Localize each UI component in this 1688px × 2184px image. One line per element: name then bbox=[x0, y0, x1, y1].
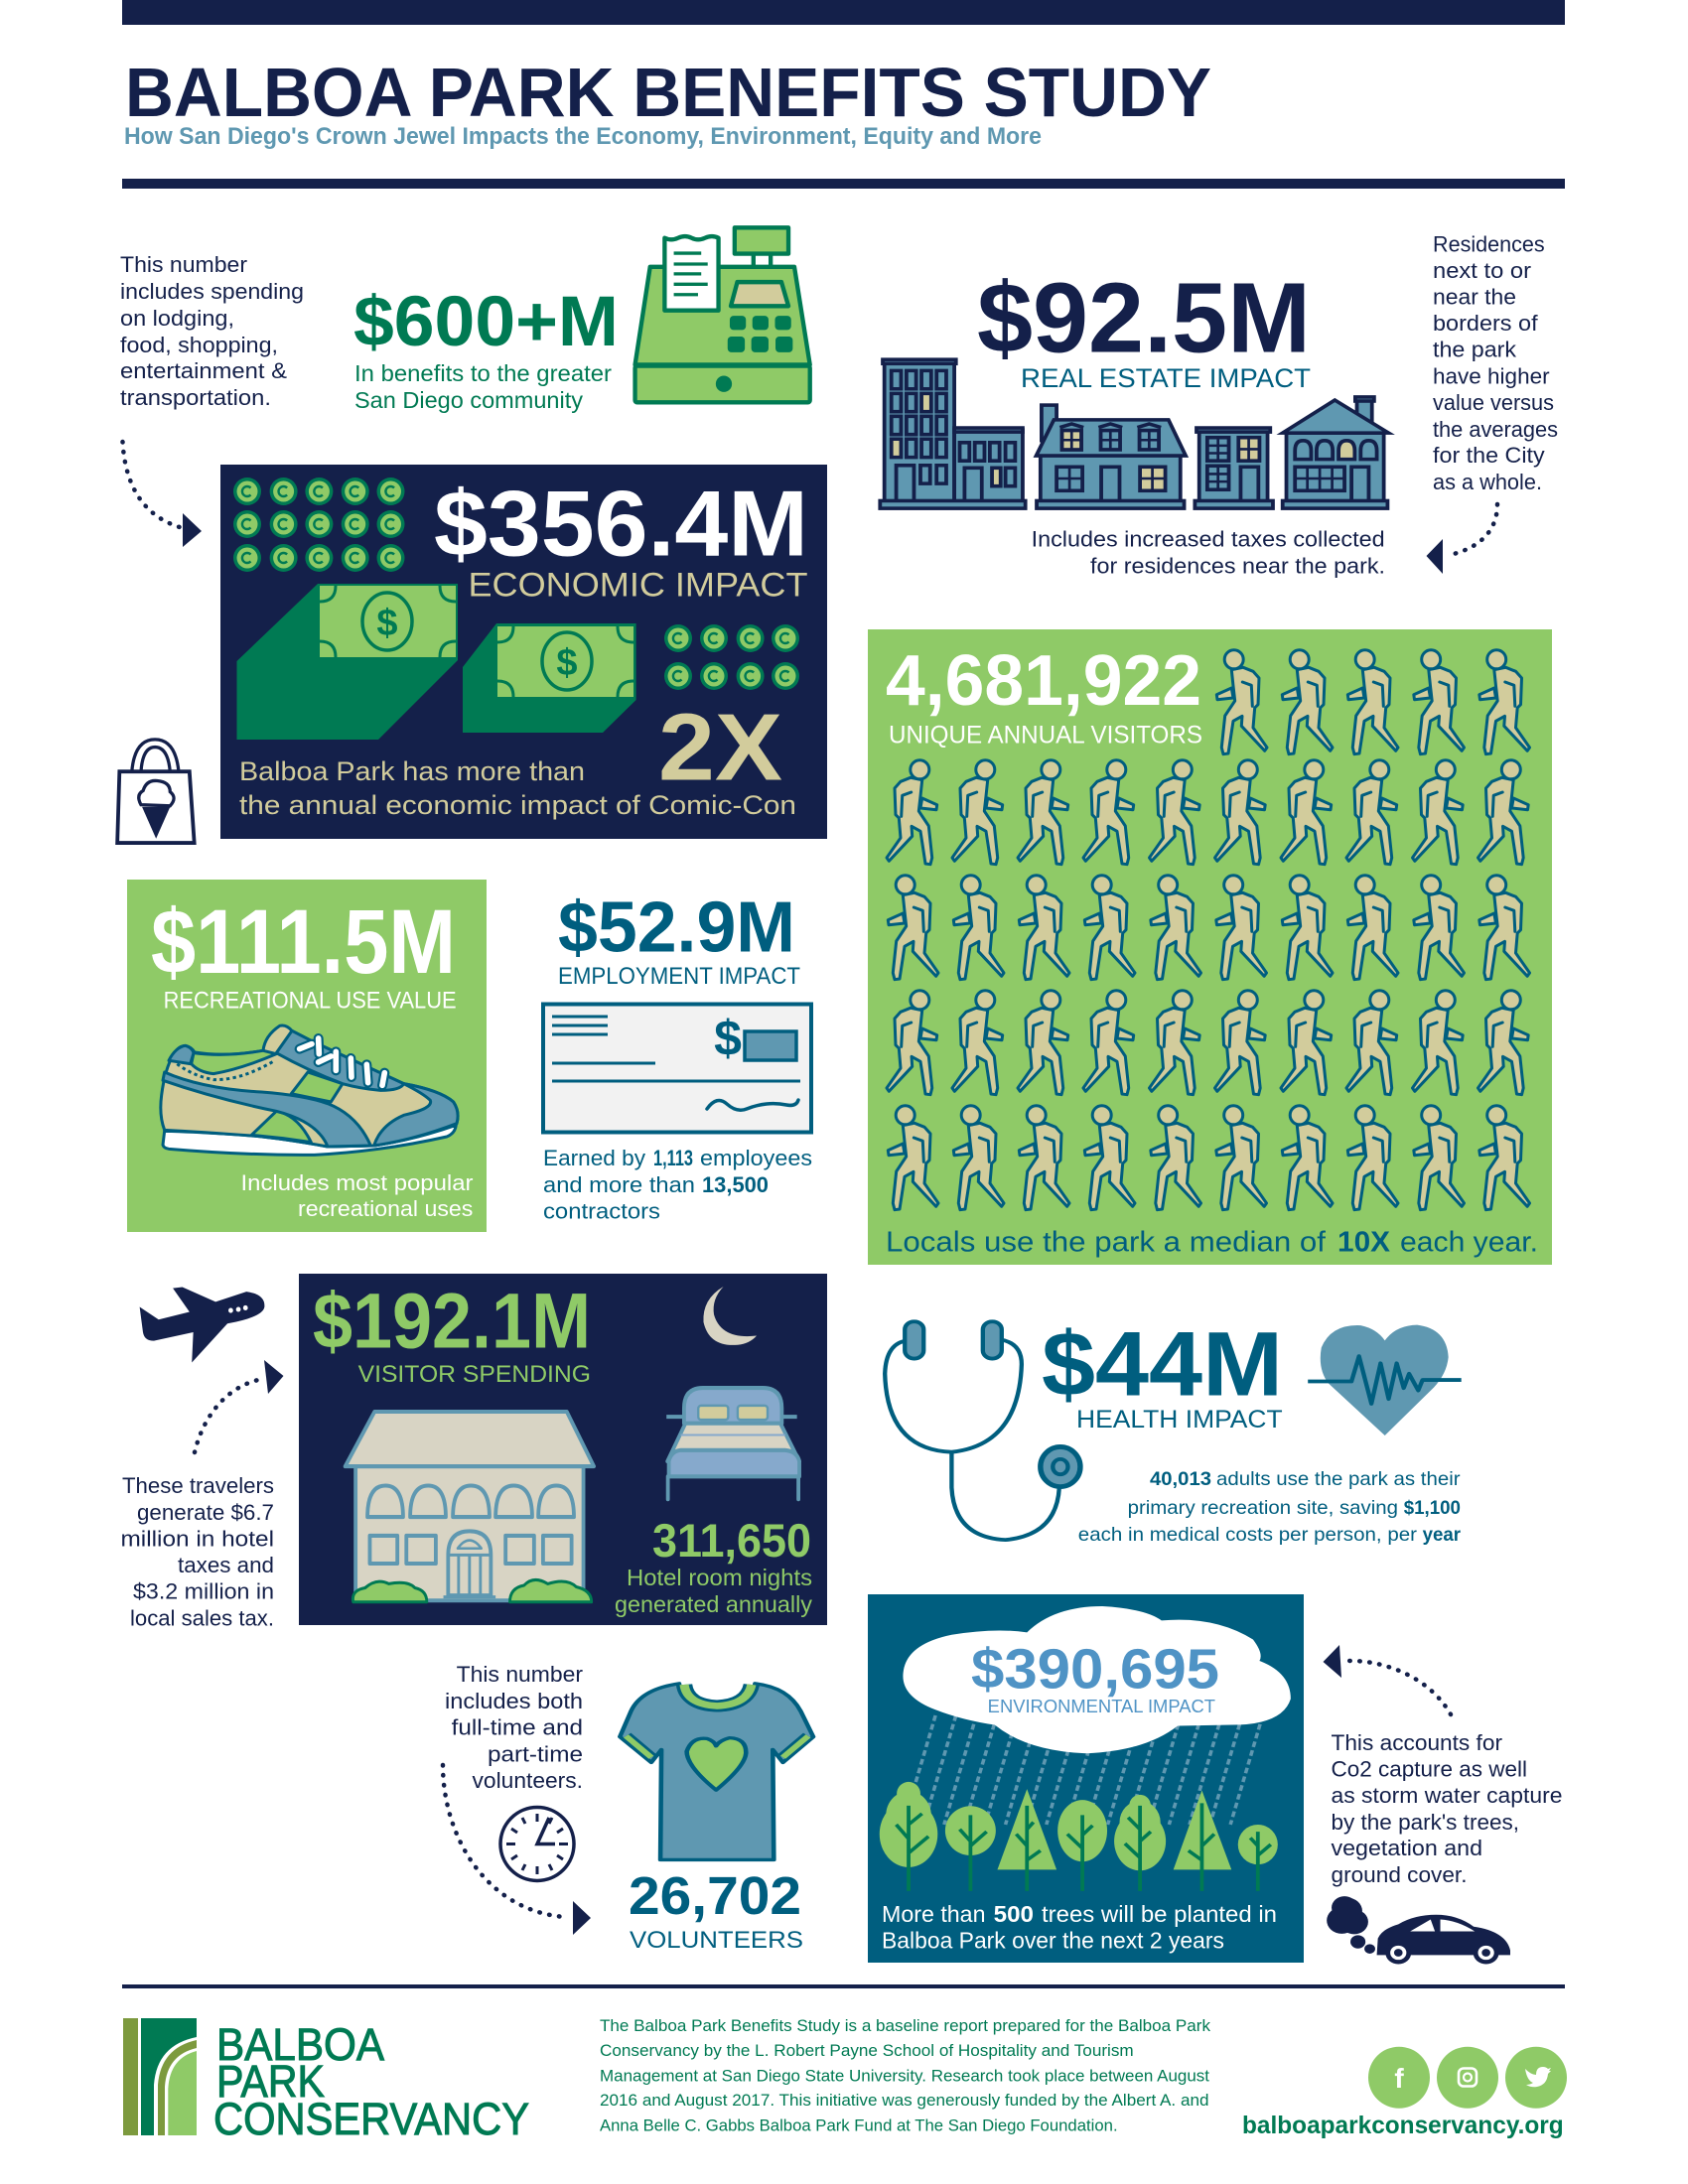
text block: volunteers note: includes both bbox=[445, 1689, 583, 1713]
text: locals median: 10X bbox=[1337, 1227, 1391, 1259]
text: employees and contractors: Earned by bbox=[543, 1146, 645, 1170]
text: employees and contractors: contractors bbox=[543, 1198, 660, 1223]
text block: study credits: 2016 and August 2017. This initiative was generously funded by the Albert A. and bbox=[600, 2092, 1209, 2110]
icon: car with exhaust bbox=[1327, 1896, 1510, 1964]
icons: walking people grid bbox=[887, 650, 1529, 1210]
coins: right grid bbox=[664, 624, 799, 690]
text block: volunteers note: part-time bbox=[488, 1742, 583, 1767]
figure: $111.5M: $111.5M bbox=[151, 891, 456, 993]
label: environmental impact: ENVIRONMENTAL IMPACT bbox=[988, 1697, 1215, 1716]
text: health savings bbox=[1078, 1468, 1461, 1546]
text block: travelers note: $3.2 million in bbox=[133, 1578, 274, 1604]
text block: residences note: borders of bbox=[1433, 311, 1538, 336]
text block: travelers note: taxes and bbox=[178, 1553, 274, 1577]
text block: residences note: value versus bbox=[1433, 390, 1554, 415]
text block: carbon capture note: ground cover. bbox=[1331, 1862, 1468, 1887]
arrow: to real estate bbox=[1426, 504, 1497, 574]
text block: carbon capture note: This accounts for bbox=[1331, 1730, 1503, 1755]
stat: volunteers: VOLUNTEERS bbox=[630, 1927, 803, 1954]
text: trees planted bbox=[882, 1901, 1277, 1954]
icon: cash register bbox=[635, 227, 810, 402]
text: health savings: adults use the park as their bbox=[1216, 1468, 1461, 1490]
icon: money stack large: $ bbox=[376, 603, 398, 644]
text: popular uses: Includes most popular bbox=[240, 1170, 473, 1195]
panel: recreational use value bbox=[127, 880, 487, 1232]
text block: spending note: entertainment & bbox=[120, 358, 287, 383]
stat: health impact: $44M bbox=[1042, 1313, 1283, 1415]
header rule bbox=[122, 179, 1565, 189]
text: employees and contractors: employees bbox=[700, 1146, 812, 1170]
stat: $600+M benefits: $600+M bbox=[353, 283, 619, 361]
icon: stethoscope bbox=[885, 1321, 1080, 1540]
text block: spending note: This number bbox=[120, 252, 248, 277]
figure: $192.1M: $192.1M bbox=[313, 1277, 591, 1364]
text: comic-con comparison: Balboa Park has more than bbox=[239, 756, 585, 786]
text: locals median bbox=[886, 1227, 1538, 1259]
icon: money stack large bbox=[236, 584, 458, 740]
text block: travelers note: These travelers bbox=[122, 1473, 274, 1498]
icon: volunteer t-shirt bbox=[620, 1684, 813, 1859]
icon: money stack small bbox=[463, 623, 636, 733]
text block: spending note: food, shopping, bbox=[120, 333, 278, 357]
icon: clock bbox=[500, 1807, 574, 1880]
text: hotel room nights: generated annually bbox=[615, 1591, 812, 1617]
logo: balboa park conservancy: PARK bbox=[216, 2056, 325, 2107]
rain bbox=[904, 1715, 1263, 1825]
text block: study credits bbox=[600, 2017, 1211, 2134]
text: increased taxes note bbox=[1032, 526, 1385, 578]
text block: residences note: next to or bbox=[1433, 258, 1532, 283]
text: employees and contractors: 1,113 bbox=[653, 1146, 693, 1170]
coins: upper left grid bbox=[233, 478, 405, 572]
icon: running shoe bbox=[161, 1025, 458, 1155]
text block: spending note: transportation. bbox=[120, 385, 271, 410]
text: employees and contractors: 13,500 bbox=[702, 1172, 769, 1197]
text: comic-con comparison: the annual economic impact of Comic-Con bbox=[239, 790, 796, 820]
panel: economic impact bbox=[220, 465, 827, 839]
text block: study credits: Conservancy by the L. Robert Payne School of Hospitality and Tourism bbox=[600, 2042, 1134, 2060]
label: recreational use value: RECREATIONAL USE VALUE bbox=[164, 988, 457, 1015]
figure: 4,681,922: 4,681,922 bbox=[886, 641, 1201, 721]
text block: carbon capture note: Co2 capture as well bbox=[1331, 1757, 1527, 1781]
text block: volunteers note: volunteers. bbox=[473, 1768, 583, 1793]
text: health savings: primary recreation site, saving bbox=[1128, 1497, 1398, 1519]
text block: volunteers note bbox=[445, 1662, 584, 1793]
arrow: to visitor spending bbox=[195, 1360, 284, 1452]
text: health savings: year bbox=[1423, 1524, 1461, 1546]
text block: residences note: have higher bbox=[1433, 364, 1550, 389]
icon: pay check bbox=[543, 1005, 811, 1132]
text block: study credits: Management at San Diego State University. Research took place between August bbox=[600, 2067, 1209, 2085]
title: BALBOA PARK BENEFITS STUDY bbox=[125, 54, 1211, 131]
figure: $356.4M: $356.4M bbox=[434, 471, 808, 576]
stat: $600+M benefits: San Diego community bbox=[354, 387, 584, 413]
footer rule bbox=[122, 1984, 1565, 1988]
arrow: to volunteers bbox=[443, 1765, 591, 1935]
panel: visitor spending bbox=[299, 1274, 827, 1625]
arrow: to economic impact bbox=[123, 442, 202, 547]
website url: balboaparkconservancy.org bbox=[1242, 2112, 1564, 2139]
stat: volunteers: 26,702 bbox=[629, 1866, 801, 1926]
text: increased taxes note: Includes increased taxes collected bbox=[1032, 526, 1385, 552]
icons: trees bbox=[880, 1782, 1278, 1891]
text block: travelers note: generate $6.7 bbox=[137, 1500, 274, 1525]
text: trees planted: 500 bbox=[994, 1901, 1034, 1927]
icon: moon bbox=[703, 1287, 757, 1345]
text: increased taxes note: for residences near the park. bbox=[1090, 554, 1385, 578]
text block: travelers note: million in hotel bbox=[121, 1527, 274, 1551]
text: locals median: Locals use the park a median of bbox=[886, 1227, 1327, 1259]
text: trees planted: trees will be planted in bbox=[1042, 1901, 1277, 1927]
icon: bed bbox=[666, 1388, 799, 1499]
text: health savings: $1,100 bbox=[1404, 1497, 1461, 1519]
text block: study credits: Anna Belle C. Gabbs Balboa Park Fund at The San Diego Foundation. bbox=[600, 2116, 1118, 2134]
icon: hotel building bbox=[346, 1412, 594, 1602]
icon: facebook bbox=[1368, 2047, 1430, 2109]
text: employees and contractors: and more than bbox=[543, 1172, 695, 1197]
text block: carbon capture note bbox=[1331, 1730, 1563, 1887]
stat: employment impact: EMPLOYMENT IMPACT bbox=[558, 963, 800, 990]
text block: spending note: on lodging, bbox=[120, 306, 234, 331]
text block: residences note: as a whole. bbox=[1433, 470, 1542, 494]
icon: shopping bag with ice cream bbox=[117, 740, 195, 843]
top bar bbox=[122, 0, 1565, 25]
text block: travelers note bbox=[121, 1473, 274, 1631]
stat: volunteers bbox=[629, 1866, 803, 1954]
panel: environmental impact bbox=[868, 1594, 1304, 1963]
label: visitor spending: VISITOR SPENDING bbox=[358, 1361, 591, 1388]
icon: cloud bbox=[903, 1606, 1291, 1753]
text: trees planted: Balboa Park over the next 2 years bbox=[882, 1928, 1224, 1954]
stat: $600+M benefits: In benefits to the greater bbox=[354, 360, 612, 386]
stat: employment impact: $52.9M bbox=[558, 887, 795, 967]
text: popular uses bbox=[240, 1170, 473, 1221]
icon: twitter bbox=[1505, 2047, 1567, 2109]
panel: visitors bbox=[868, 629, 1552, 1265]
stat: health impact: HEALTH IMPACT bbox=[1076, 1406, 1283, 1433]
text: trees planted: More than bbox=[882, 1901, 985, 1927]
text block: residences note: near the bbox=[1433, 285, 1516, 310]
icon: facebook: f bbox=[1394, 2063, 1404, 2094]
text: employees and contractors bbox=[543, 1146, 812, 1223]
figure: $390,695: $390,695 bbox=[971, 1638, 1219, 1702]
text block: residences note: the park bbox=[1433, 338, 1517, 362]
subtitle: How San Diego's Crown Jewel Impacts the Economy, Environment, Equity and More bbox=[124, 123, 1042, 150]
text block: residences note: the averages bbox=[1433, 417, 1558, 442]
arrow: to environmental impact bbox=[1323, 1645, 1451, 1714]
logo: balboa park conservancy bbox=[123, 2018, 529, 2144]
text block: study credits: The Balboa Park Benefits Study is a baseline report prepared for the Balboa Park bbox=[600, 2017, 1211, 2035]
stat: real estate impact: $92.5M bbox=[977, 263, 1311, 374]
logo: balboa park conservancy: BALBOA bbox=[216, 2019, 384, 2070]
text block: travelers note: local sales tax. bbox=[130, 1606, 274, 1631]
text block: volunteers note: This number bbox=[457, 1662, 584, 1687]
icon: pay check: $ bbox=[714, 1011, 742, 1066]
text: hotel room nights: Hotel room nights bbox=[627, 1565, 812, 1590]
icon: airplane bbox=[140, 1288, 264, 1363]
text: health savings: 40,013 bbox=[1150, 1468, 1211, 1490]
icon: heart with pulse bbox=[1308, 1325, 1462, 1435]
text block: volunteers note: full-time and bbox=[452, 1715, 583, 1740]
text: popular uses: recreational uses bbox=[298, 1196, 473, 1221]
text block: residences note: for the City bbox=[1433, 443, 1545, 468]
icon: money stack small: $ bbox=[556, 642, 578, 684]
stat: real estate impact: REAL ESTATE IMPACT bbox=[1021, 363, 1311, 393]
text block: spending note: includes spending bbox=[120, 279, 304, 304]
label: economic impact: ECONOMIC IMPACT bbox=[469, 567, 808, 605]
text: comic-con comparison bbox=[239, 756, 796, 820]
icon: row of buildings bbox=[880, 359, 1389, 508]
text block: carbon capture note: vegetation and bbox=[1331, 1836, 1482, 1860]
text block: residences note: Residences bbox=[1433, 232, 1545, 257]
text: locals median: each year. bbox=[1400, 1227, 1538, 1259]
text block: carbon capture note: by the park's trees, bbox=[1331, 1810, 1519, 1835]
icon: instagram bbox=[1437, 2047, 1498, 2109]
figure: 311,650: 311,650 bbox=[652, 1515, 811, 1568]
text: hotel room nights bbox=[615, 1565, 812, 1617]
text block: spending note bbox=[120, 252, 304, 410]
label: unique annual visitors: UNIQUE ANNUAL VISITORS bbox=[889, 721, 1202, 749]
text block: carbon capture note: as storm water capture bbox=[1331, 1783, 1563, 1808]
logo: balboa park conservancy: CONSERVANCY bbox=[213, 2094, 529, 2144]
text: health savings: each in medical costs per person, per bbox=[1078, 1524, 1418, 1546]
text block: residences note bbox=[1433, 232, 1558, 494]
stat: $600+M benefits bbox=[353, 283, 619, 413]
figure: 2X: 2X bbox=[658, 695, 782, 800]
